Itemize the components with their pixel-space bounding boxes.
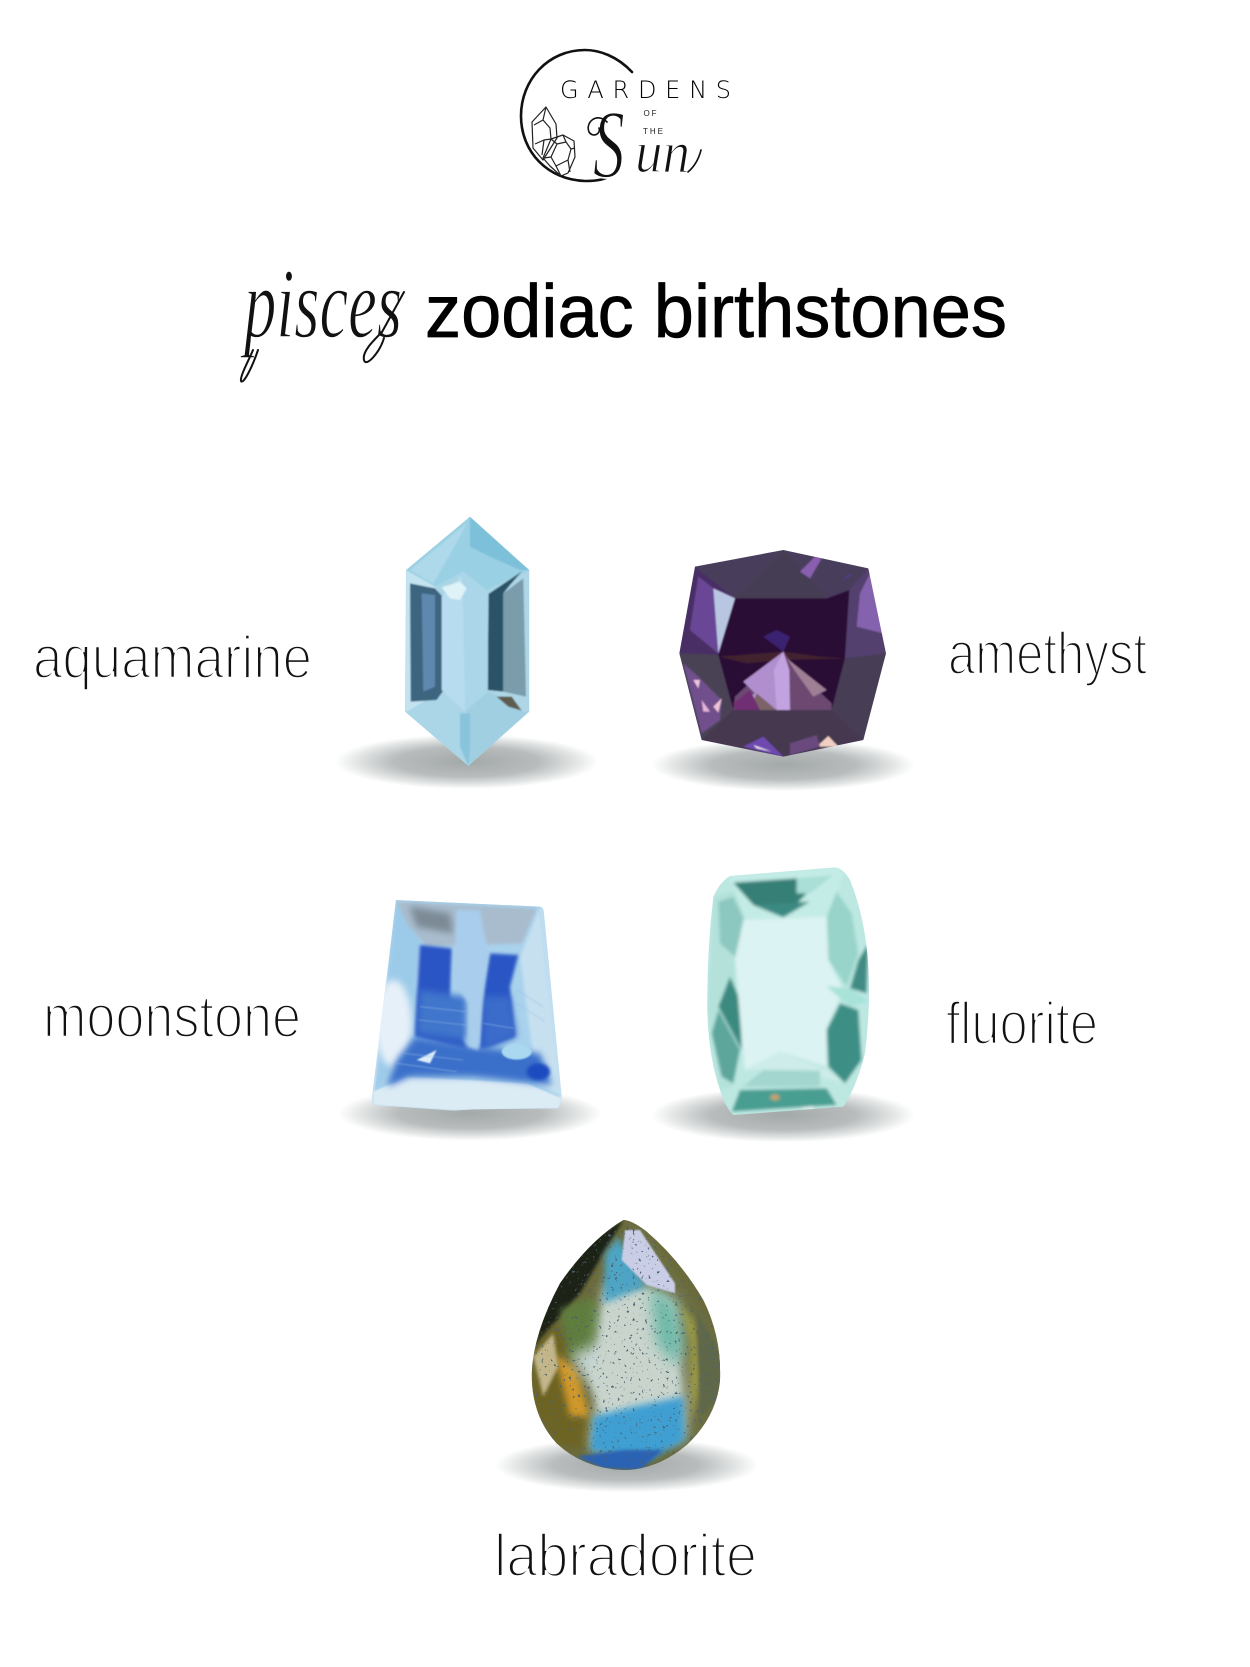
label: labradorite: labradorite — [494, 1522, 757, 1589]
gem: labradorite — [495, 1217, 758, 1492]
stone — [370, 897, 567, 1117]
stone — [703, 863, 873, 1120]
shadow — [338, 1086, 602, 1141]
title script word: pisces — [240, 248, 402, 359]
shadow — [335, 734, 598, 789]
logo wordmark un: un — [635, 120, 690, 185]
logo flourish — [588, 118, 701, 172]
label: aquamarine: aquamarine — [33, 624, 312, 691]
title flourish descenders — [241, 292, 404, 382]
title — [240, 248, 1007, 382]
icon: crystals in logo — [532, 107, 575, 176]
stone — [527, 1217, 727, 1477]
label: moonstone: moonstone — [43, 983, 301, 1050]
shadow — [495, 1438, 758, 1492]
shadow — [652, 1088, 915, 1142]
shadow — [652, 739, 915, 791]
logo: Gardens of the Sun — [521, 50, 731, 198]
striations — [397, 990, 545, 1072]
label: fluorite: fluorite — [946, 990, 1098, 1057]
gem: fluorite — [652, 863, 915, 1142]
logo circle arc — [521, 50, 632, 181]
speckles — [532, 1222, 720, 1470]
logo wordmark THE: THE — [643, 127, 665, 136]
logo wordmark GARDENS: GARDENS — [560, 76, 731, 104]
stone — [677, 547, 890, 760]
gem: amethyst — [652, 547, 915, 791]
title sans words: zodiac birthstones — [425, 269, 1007, 353]
gem: aquamarine — [335, 513, 598, 789]
label: amethyst: amethyst — [948, 620, 1147, 687]
gem: moonstone — [338, 897, 602, 1141]
logo wordmark OF: OF — [643, 109, 659, 118]
stone — [400, 513, 533, 770]
logo wordmark Sun: S — [593, 90, 625, 198]
